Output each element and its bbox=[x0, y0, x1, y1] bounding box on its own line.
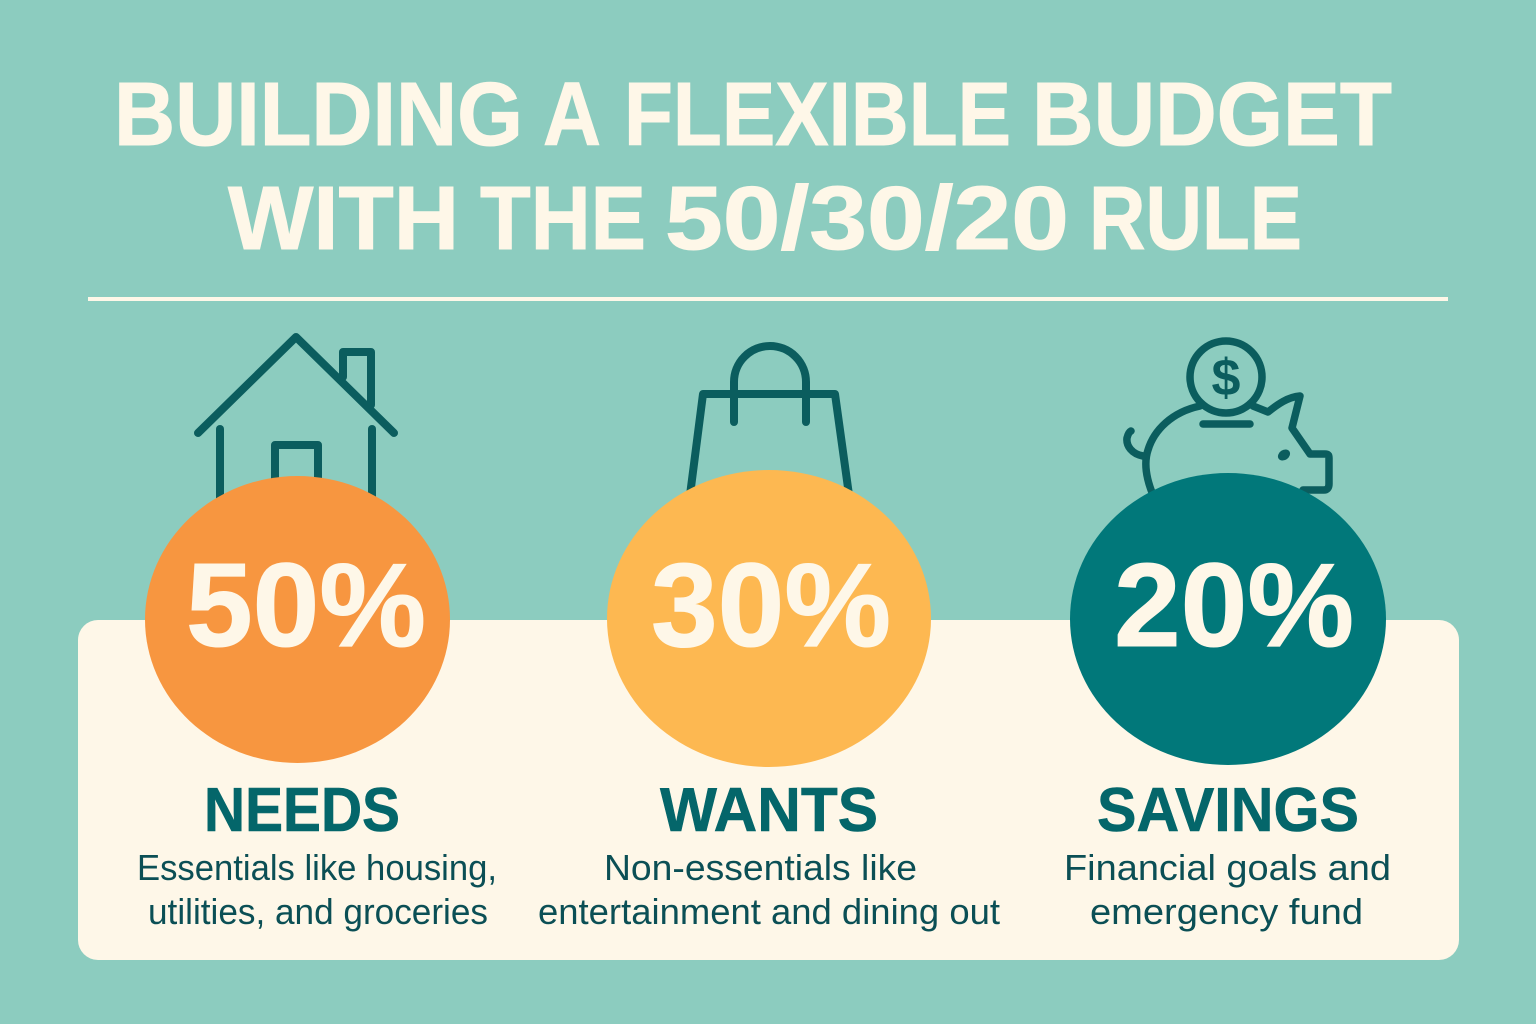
text: wants description: entertainment and dining out bbox=[538, 891, 1000, 932]
percent circle: 20%: 20% bbox=[1114, 539, 1354, 672]
percent circle: 50%: 50% bbox=[186, 539, 426, 672]
text: savings description bbox=[1064, 847, 1391, 932]
title bbox=[114, 65, 1392, 269]
title: FLEXIBLE bbox=[624, 65, 1011, 165]
title: BUILDING bbox=[114, 65, 523, 165]
icon: shopping bag bbox=[690, 346, 849, 495]
heading: wants: WANTS bbox=[660, 776, 878, 845]
icon: house bbox=[198, 337, 394, 500]
column: needs bbox=[137, 476, 497, 932]
text: wants description bbox=[538, 847, 1000, 932]
heading: needs: NEEDS bbox=[204, 776, 400, 845]
percent circle: 30%: 30% bbox=[651, 539, 891, 672]
heading: savings: SAVINGS bbox=[1097, 776, 1359, 845]
title: BUDGET bbox=[1032, 65, 1392, 165]
icon: piggy bank with coin bbox=[1127, 341, 1329, 495]
column: wants bbox=[538, 470, 1000, 932]
text: savings description: Financial goals and bbox=[1064, 847, 1391, 888]
title: WITH bbox=[228, 169, 459, 269]
title: A bbox=[543, 65, 601, 165]
text: savings description: emergency fund bbox=[1090, 891, 1363, 932]
panel: cream card bbox=[78, 620, 1459, 960]
title: 50/30/20 bbox=[665, 169, 1069, 269]
column: savings bbox=[1064, 473, 1391, 932]
percent circle: 30% bbox=[607, 470, 931, 767]
percent circle: 50% bbox=[145, 476, 450, 763]
title: THE bbox=[480, 169, 646, 269]
icon: piggy bank with coin: $ bbox=[1212, 349, 1241, 407]
text: wants description: Non-essentials like bbox=[604, 847, 917, 888]
percent circle: 20% bbox=[1070, 473, 1386, 765]
text: needs description: Essentials like housing, bbox=[137, 847, 497, 888]
text: needs description bbox=[137, 847, 497, 932]
title: RULE bbox=[1089, 169, 1302, 269]
text: needs description: utilities, and groceries bbox=[148, 891, 488, 932]
